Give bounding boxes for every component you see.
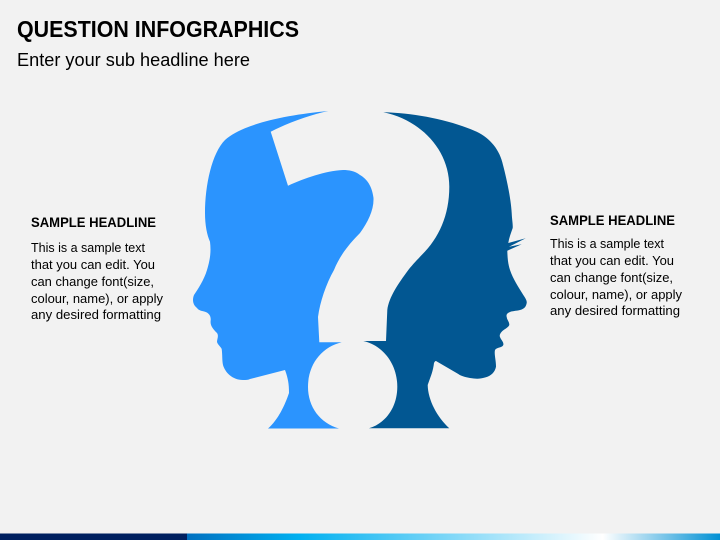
subtitle: Enter your sub headline here xyxy=(17,50,250,70)
right headline: SAMPLE HEADLINE xyxy=(550,212,675,228)
right text block xyxy=(550,212,682,318)
left body text: any desired formatting xyxy=(31,307,161,322)
right body text xyxy=(550,236,682,318)
right body text: This is a sample text xyxy=(550,236,664,251)
left body text: This is a sample text xyxy=(31,240,145,255)
footer bar xyxy=(0,534,720,540)
right head silhouette xyxy=(363,112,527,428)
left head silhouette xyxy=(193,111,374,428)
right body text: any desired formatting xyxy=(550,303,680,318)
right body text: colour, name), or apply xyxy=(550,287,682,302)
left headline: SAMPLE HEADLINE xyxy=(31,214,156,230)
left body text: can change font(size, xyxy=(31,274,154,289)
left body text: colour, name), or apply xyxy=(31,291,163,306)
right body text: can change font(size, xyxy=(550,270,673,285)
left body text xyxy=(31,240,163,322)
title: QUESTION INFOGRAPHICS xyxy=(17,16,299,42)
left body text: that you can edit. You xyxy=(31,257,155,272)
left text block xyxy=(31,214,163,322)
right body text: that you can edit. You xyxy=(550,253,674,268)
